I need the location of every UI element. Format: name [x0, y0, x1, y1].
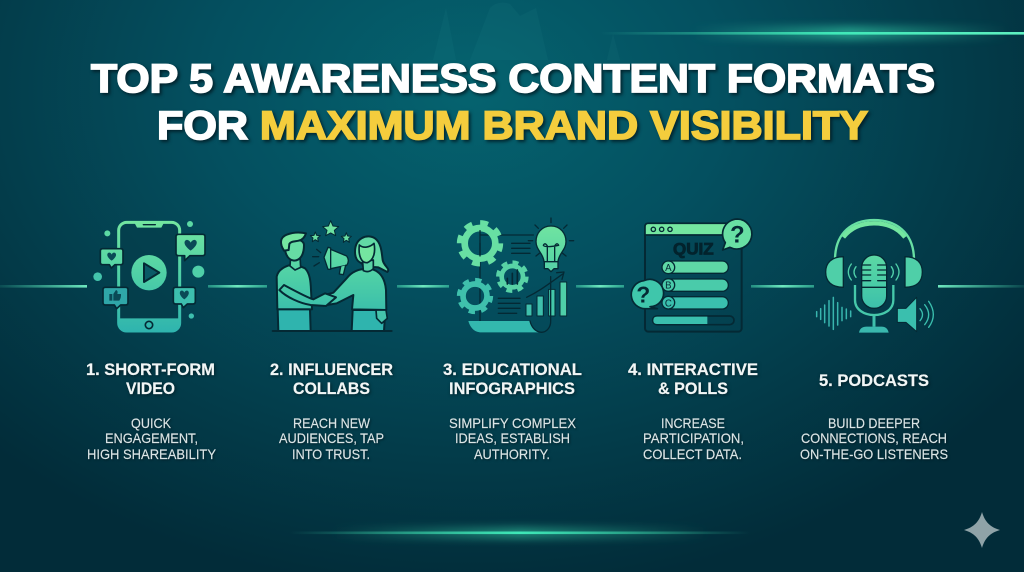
icon: podcast microphone and headphones — [817, 220, 933, 333]
column 1 description — [87, 416, 216, 462]
icon: quiz window: ? — [636, 281, 650, 307]
icon: quiz window: B — [665, 281, 672, 292]
column 3 heading — [443, 360, 582, 398]
column 2 heading — [270, 360, 393, 398]
icon: influencer handshake — [273, 221, 392, 331]
icon: quiz window: C — [665, 298, 672, 309]
horizontal connector line — [0, 285, 1024, 288]
column 5 heading: 5. PODCASTS — [819, 371, 929, 390]
faint background silhouettes — [433, 3, 620, 60]
column 1 description: QUICK — [131, 416, 171, 431]
column 3 description: SIMPLIFY COMPLEX — [449, 416, 576, 431]
column 2 heading: COLLABS — [293, 379, 370, 398]
title — [91, 57, 935, 148]
column 1 description: ENGAGEMENT, — [105, 431, 198, 446]
icon: quiz window — [631, 219, 752, 332]
column 2 description: REACH NEW — [293, 416, 370, 431]
icon: educational infographic — [459, 218, 574, 332]
column 5 description — [800, 416, 948, 462]
column 1 heading — [86, 360, 215, 398]
column 3 description — [449, 416, 576, 462]
column 2 heading: 2. INFLUENCER — [270, 360, 393, 379]
column 3 heading: 3. EDUCATIONAL — [443, 360, 582, 379]
column 4 description: INCREASE — [661, 416, 725, 431]
column 1 heading: VIDEO — [126, 379, 175, 398]
column 2 description: AUDIENCES, TAP — [279, 431, 384, 446]
column 4 heading: & POLLS — [658, 379, 728, 398]
column 1 description: HIGH SHAREABILITY — [87, 447, 216, 462]
column 5 description: ON-THE-GO LISTENERS — [800, 447, 948, 462]
title: FOR MAXIMUM BRAND VISIBILITY — [157, 104, 868, 148]
bottom glow line — [290, 527, 750, 539]
title: TOP 5 AWARENESS CONTENT FORMATS — [91, 57, 935, 101]
column 1 heading: 1. SHORT-FORM — [86, 360, 215, 379]
icon: quiz window: ? — [730, 222, 745, 249]
column 5 description: CONNECTIONS, REACH — [801, 431, 947, 446]
column 4 description: COLLECT DATA. — [643, 447, 742, 462]
column 3 description: AUTHORITY. — [474, 447, 550, 462]
column 4 description — [643, 416, 744, 462]
column 4 description: PARTICIPATION, — [643, 431, 744, 446]
icon: phone with video — [93, 221, 205, 332]
column 2 description — [279, 416, 384, 462]
column 4 heading: 4. INTERACTIVE — [628, 360, 758, 379]
column 5 description: BUILD DEEPER — [828, 416, 920, 431]
column 3 description: IDEAS, ESTABLISH — [455, 431, 570, 446]
column 3 heading: INFOGRAPHICS — [449, 379, 575, 398]
icon: sparkle watermark — [964, 512, 1000, 548]
icon: quiz window: A — [665, 263, 672, 274]
column 4 heading — [628, 360, 758, 398]
top glow line — [600, 26, 1024, 40]
column 2 description: INTO TRUST. — [292, 447, 370, 462]
icon: quiz window: QUIZ — [673, 240, 714, 259]
